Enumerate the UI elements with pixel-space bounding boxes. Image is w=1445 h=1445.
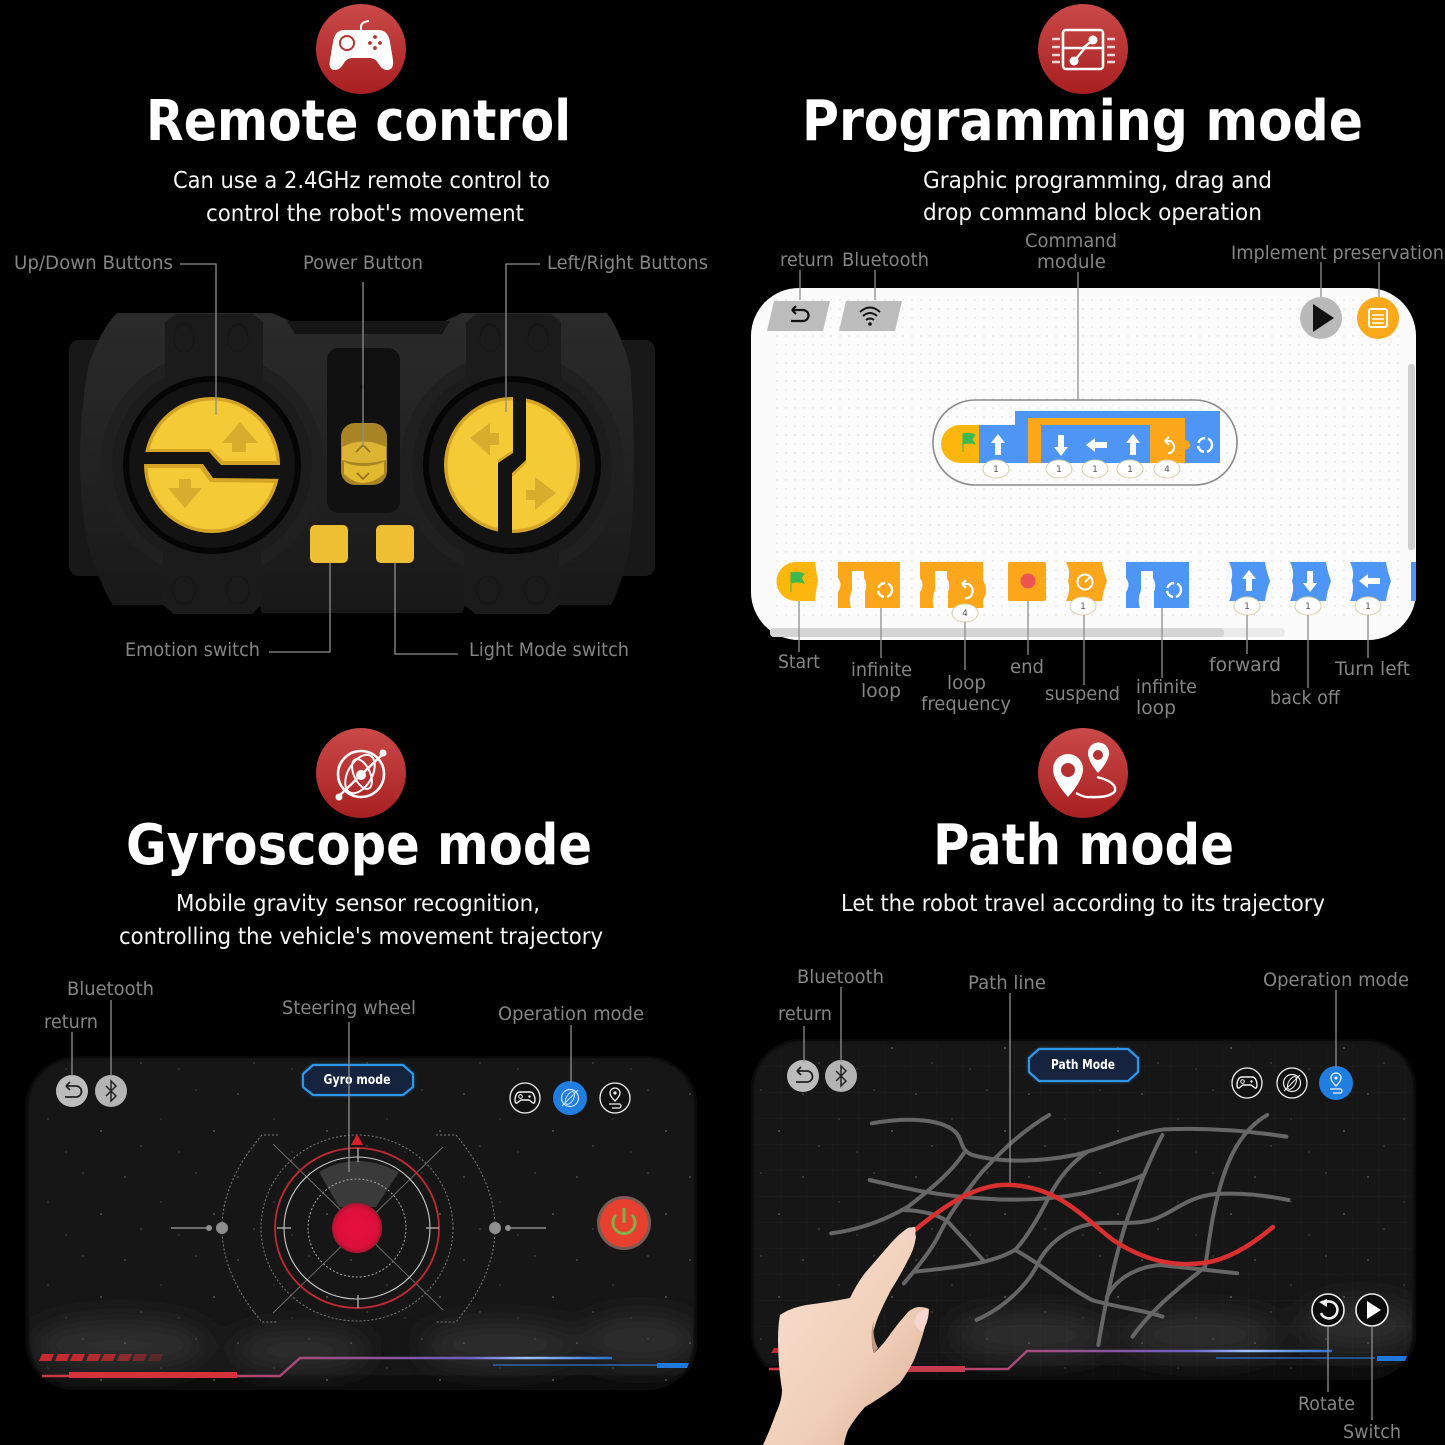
status line [42,1358,689,1378]
callout labels: path: Switch [1343,1421,1401,1443]
callout labels: programming: loop [947,672,986,694]
icon: route pins [1038,728,1128,818]
callout labels: programming: Start [778,651,820,673]
block: loop frequency [920,562,986,608]
description: remote control: control the robot's movement [206,201,524,227]
emotion switch button [310,525,348,563]
palette blocks: 1 [1080,602,1086,612]
command module sample: 1 [1127,465,1133,475]
description: gyroscope mode [119,891,603,950]
callout labels: programming: suspend [1045,683,1120,705]
button: implement [1300,297,1342,339]
callout labels: programming: infinite [851,659,912,681]
button: bluetooth [95,1075,127,1107]
panel: programming mode [751,4,1444,719]
panel: gyroscope mode [27,728,700,1390]
callout labels: path: Bluetooth [797,966,884,988]
callout labels: path: return [778,1003,832,1025]
mode badge [303,1065,413,1095]
callout labels: remote [14,252,708,661]
mode badge: Path Mode [1051,1058,1115,1073]
callout labels: path [778,966,1409,1443]
light mode switch button [376,525,414,563]
slider slot [327,348,400,513]
palette blocks: 1 [1244,602,1250,612]
callout labels: gyro: Steering wheel [282,997,416,1019]
callout labels: programming: Turn left [1334,658,1410,680]
callout labels: path: Path line [968,972,1046,994]
callout labels: programming: return [780,249,834,271]
callout labels: programming: loop [1136,697,1176,719]
power slider [341,423,387,485]
title: remote control: Remote control [146,89,571,154]
palette blocks: 1 [1365,602,1371,612]
mode: remote [1232,1068,1262,1098]
button: return [767,301,830,331]
callout labels: gyro: Bluetooth [67,978,154,1000]
callout labels: programming: back off [1270,687,1341,709]
description: programming mode: drop command block operation [923,200,1262,226]
panel: remote control [14,4,708,661]
callout labels: gyro [44,978,644,1033]
callout labels: gyro: Operation mode [498,1003,644,1025]
command module sample: 1 [1056,465,1062,475]
leader lines: gyro [72,1000,571,1172]
app screen: gyro [27,1058,700,1390]
title: path mode: Path mode [933,813,1234,878]
palette blocks: 4 [962,609,968,619]
callout labels: programming: Command [1025,230,1117,252]
callout labels: remote: Light Mode switch [469,639,629,661]
leader lines: path [804,987,1372,1420]
palette blocks [777,562,1416,622]
command module sample: 4 [1164,465,1170,475]
path line [915,1185,1273,1264]
road map [831,1115,1289,1345]
power button [597,1196,651,1250]
left dial [123,376,301,554]
block: start [777,562,818,601]
block: infinite loop blue [1126,562,1189,608]
right dial [423,376,601,554]
callout labels: gyro: return [44,1011,98,1033]
description: remote control [173,168,550,227]
button: bluetooth wifi [839,301,902,331]
callout labels: programming: forward [1209,654,1281,676]
leader lines: programming [799,262,1379,688]
vertical scrollbar [1408,364,1415,550]
title: programming mode: Programming mode [802,89,1363,154]
app screen: programming [751,288,1416,640]
callout labels: programming: Bluetooth [842,249,929,271]
button: switch [1356,1294,1388,1326]
description: gyroscope mode: Mobile gravity sensor recognition, [176,891,540,917]
mode: path active [1319,1066,1353,1100]
block: suspend [1066,562,1107,601]
mode badge: Gyro mode [324,1073,391,1088]
status line [769,1348,1407,1372]
command module sample: 1 [993,465,999,475]
leader lines: remote [180,264,540,654]
icon: gyroscope [316,728,406,818]
description: path mode: Let the robot travel according to its trajectory [841,891,1325,917]
button: bluetooth [825,1060,857,1092]
description: programming mode: Graphic programming, drag and [923,168,1272,194]
callout labels: programming: end [1010,656,1044,678]
mode: gyro active [553,1081,587,1115]
block: partial [1411,562,1416,601]
block: turn left [1350,562,1391,601]
command module sample [933,400,1237,485]
callout labels: programming: loop [861,680,901,702]
command module sample: 1 [1092,465,1098,475]
block: end [1008,562,1046,601]
title: gyroscope mode: Gyroscope mode [126,813,592,878]
callout labels: remote: Left/Right Buttons [547,252,708,274]
callout labels: remote: Power Button [303,252,423,274]
panel: path mode [752,728,1420,1445]
button: rotate [1312,1294,1344,1326]
description: gyroscope mode: controlling the vehicle's movement trajectory [119,924,603,950]
callout labels: programming [778,230,1444,719]
icon: gamepad [316,4,406,94]
mode badge [1029,1049,1138,1081]
callout labels: path: Operation mode [1263,969,1409,991]
description: remote control: Can use a 2.4GHz remote control to [173,168,550,194]
horizontal scrollbar [770,628,1285,637]
callout labels: path: Rotate [1298,1393,1355,1415]
progress dashes [39,1354,163,1361]
callout labels: remote: Up/Down Buttons [14,252,173,274]
mode: path [600,1083,630,1113]
block: back off [1290,562,1331,601]
steering wheel [171,1134,546,1322]
hand pointing [763,1227,929,1445]
app screen: path [752,1041,1420,1380]
button: return [56,1075,88,1107]
block: infinite loop [838,562,900,608]
mode: gyro [1277,1068,1307,1098]
remote control device [69,313,655,614]
callout labels: programming: module [1037,251,1106,273]
button: return [787,1060,819,1092]
description: programming mode [923,168,1272,226]
mode: remote [510,1083,540,1113]
callout labels: programming: infinite [1136,676,1197,698]
icon: circuit chip [1038,4,1128,94]
button: save [1357,297,1399,339]
block: forward [1229,562,1270,601]
palette blocks: 1 [1305,602,1311,612]
callout labels: programming: frequency [921,693,1011,715]
callout labels: remote: Emotion switch [125,639,260,661]
